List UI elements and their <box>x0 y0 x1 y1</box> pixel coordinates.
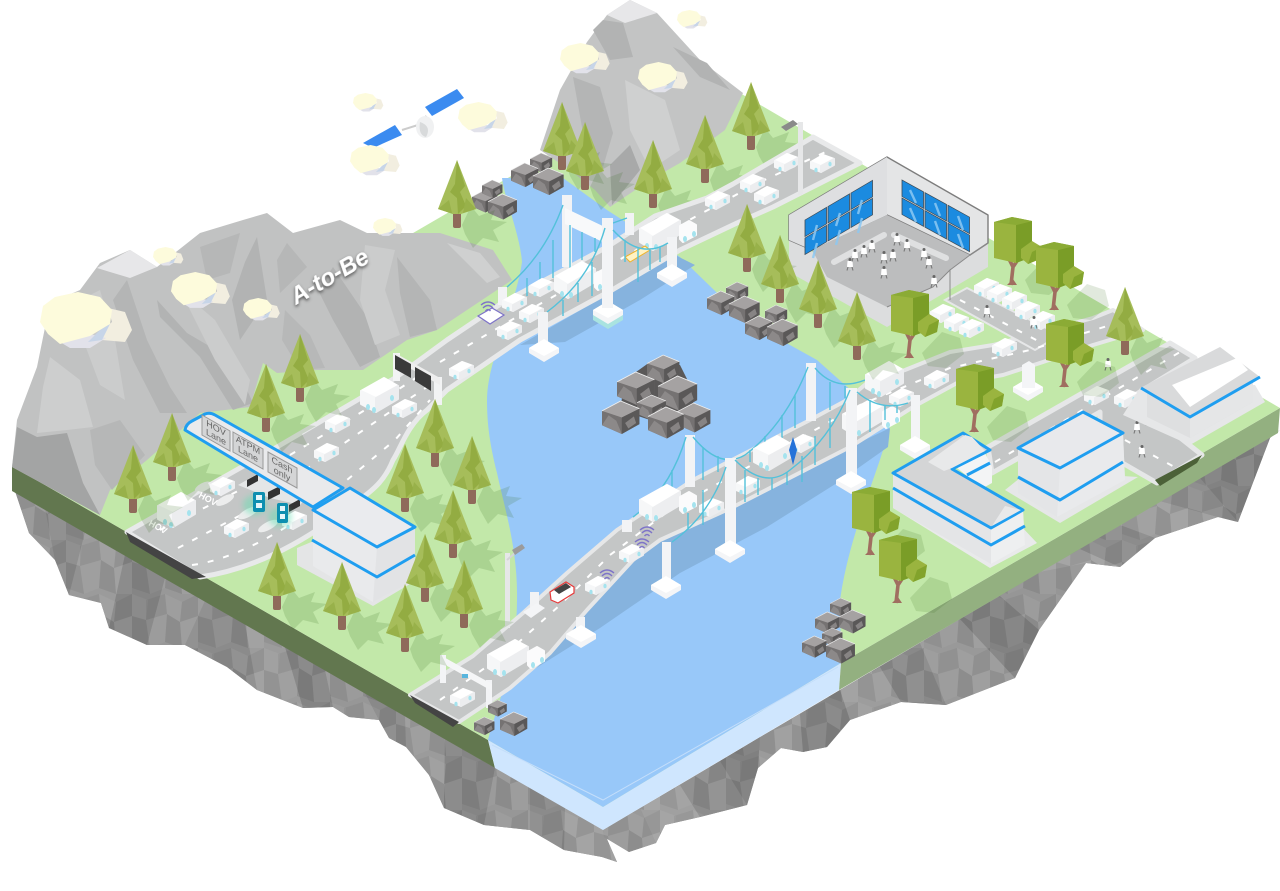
vehicle: ambulance <box>550 582 574 603</box>
cliff underside: right face <box>603 430 1280 852</box>
monument <box>1013 361 1043 401</box>
operator desks <box>834 235 946 262</box>
toll canopy <box>185 413 343 507</box>
bridge shadow on water: lower bridge <box>503 428 890 690</box>
notch boxes <box>957 453 992 488</box>
deciduous trees <box>852 217 1119 613</box>
upper suspension bridge <box>450 154 834 379</box>
parked cars <box>925 279 1054 388</box>
lower trim <box>893 488 1025 545</box>
bridge front tower and piers <box>529 218 687 362</box>
road: lower right street <box>988 343 1202 483</box>
pedestrians: parking lane <box>984 305 1111 370</box>
video wall left <box>805 180 872 254</box>
sign: Cash only: only <box>274 465 290 484</box>
wifi signals <box>600 527 654 579</box>
toll booths <box>238 455 312 527</box>
apron <box>893 475 1037 568</box>
river <box>487 178 890 807</box>
road labels: HOV <box>147 490 219 536</box>
lower suspension bridge <box>451 362 930 706</box>
river inner edge line <box>492 667 838 800</box>
video wall right <box>902 180 970 252</box>
vehicles and cyclists: lower right street <box>1085 387 1152 458</box>
sign: Cash only <box>268 452 297 488</box>
toll signs <box>202 415 297 488</box>
side band: water edge <box>488 663 841 830</box>
bridge front cables <box>547 228 668 316</box>
label: A-to-Be on mountain: A-to-Be <box>285 243 374 311</box>
floor <box>812 215 970 307</box>
screen highlights <box>813 190 963 258</box>
sign: HOV Lane: HOV <box>206 418 226 439</box>
building: right warehouse <box>1123 347 1265 445</box>
side band: dark grass edge, left <box>12 466 495 768</box>
vehicle: autonomous shuttle with wifi <box>478 302 504 324</box>
vehicle: highlighted car <box>625 246 650 262</box>
road: lower right markings <box>995 352 1180 470</box>
building: L-shaped block <box>893 433 1037 568</box>
notch: road edge at lower bridge <box>410 695 459 727</box>
roof <box>893 433 1023 528</box>
road labels: HOV: HOV <box>197 490 219 508</box>
sign: ATPM Lane <box>233 432 263 469</box>
cloud: below satellite <box>350 145 400 175</box>
camera pole: riverside <box>505 544 525 628</box>
rock cluster: lower right bank <box>802 598 866 664</box>
road labels: HOV: HOV <box>147 518 169 536</box>
sign: Cash only: Cash <box>272 455 292 477</box>
outer walls <box>789 237 988 327</box>
road: lane markings <box>160 150 830 565</box>
control center building <box>789 157 988 327</box>
cliff underside: left face <box>12 490 617 862</box>
sign: HOV Lane <box>202 415 230 451</box>
road: lane markings on lower bridge <box>440 300 1120 700</box>
toll lane islands <box>193 479 280 535</box>
rock clusters: river banks <box>472 153 798 346</box>
icon: satellite <box>363 89 464 148</box>
mountain: upper peak <box>540 0 743 207</box>
front cables <box>672 390 908 542</box>
back cables <box>633 367 865 517</box>
road: lower bridge and right junction <box>410 310 1143 722</box>
bridge back cables <box>507 205 627 296</box>
pine trees: mid right and centre row <box>728 204 1175 380</box>
back towers <box>523 363 816 618</box>
sign: HOV Lane: Lane <box>206 427 226 448</box>
camera pole: top right <box>781 120 803 195</box>
front towers and piers <box>566 388 930 648</box>
vehicles: upper bridge <box>450 154 834 379</box>
mountain range: left <box>12 213 512 515</box>
back walls <box>789 157 988 255</box>
pine trees: back row <box>438 82 801 248</box>
rock cluster: lower bank near gantry <box>474 700 527 736</box>
clouds <box>40 10 707 348</box>
vehicles: toll plaza road <box>158 378 416 537</box>
sign: ATPM Lane: Lane <box>238 444 258 465</box>
building: centre block <box>1005 412 1138 523</box>
notch: tunnel edge, toll road <box>126 532 206 579</box>
rock cluster: river centre <box>602 355 710 438</box>
operators <box>847 233 937 288</box>
bridge back tower and portal <box>498 195 634 305</box>
icon: collision alert <box>789 437 797 465</box>
gantry: lower road detection frame <box>440 655 492 708</box>
vehicles: lower bridge <box>451 362 913 706</box>
road: toll plaza through upper bridge <box>127 137 860 577</box>
bridge shadow on water: upper bridge <box>520 255 695 345</box>
gantry: upper road variable message signs <box>393 353 442 405</box>
notch: road edge lower right <box>1155 455 1202 486</box>
road: parking lane <box>945 288 1060 350</box>
side band: light grass edge, right <box>839 408 1280 690</box>
walls <box>893 473 1025 564</box>
building: toll office <box>297 488 425 606</box>
pine trees: left forest <box>114 334 522 672</box>
sign: ATPM Lane: ATPM <box>236 434 260 457</box>
